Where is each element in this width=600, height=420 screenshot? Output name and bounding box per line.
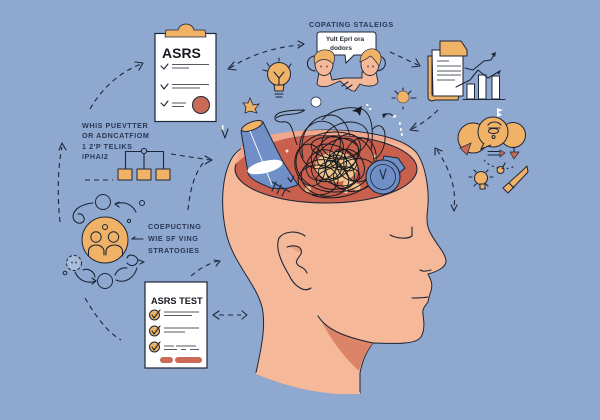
speech bubble	[317, 32, 376, 63]
text: left description: 1 2'P TELIKS	[82, 142, 133, 151]
org chart	[85, 148, 170, 180]
text: coping strategies label: COEPUCTING	[148, 222, 201, 231]
icon: people circle with orbit	[63, 194, 145, 288]
text: coping strategies label: STRATOGIES	[148, 246, 200, 255]
panel: ASRS test sheet	[145, 282, 207, 368]
nose and mouth	[412, 270, 431, 298]
speech bubble: dodors	[330, 45, 352, 52]
small white marks	[222, 104, 403, 136]
two people shaking hands	[307, 49, 385, 91]
text: left description	[82, 121, 149, 161]
panel: ASRS test sheet: ASRS TEST	[151, 296, 203, 306]
panel: ASRS clipboard: ASRS	[162, 45, 201, 61]
scribble arrowhead	[352, 106, 362, 116]
bulbs and pencil	[469, 160, 528, 193]
ear	[278, 232, 311, 290]
thought bubbles	[458, 108, 526, 159]
heading: coping strategies: COPATING STALEIGS	[309, 20, 394, 29]
text: left description: WHIS PUEVTTER	[82, 121, 149, 130]
icon: light bulb	[263, 58, 291, 97]
document with growth chart	[428, 41, 505, 101]
small white circle	[311, 97, 321, 107]
head profile	[223, 130, 446, 393]
tangled scribble	[275, 108, 385, 201]
star	[243, 98, 259, 113]
open skull cavity	[235, 130, 417, 203]
neck shadow	[322, 322, 373, 371]
tipped cylinder	[240, 118, 298, 196]
speech bubble: Yult Eprl ora	[326, 36, 365, 43]
text: coping strategies label: WIE SF VING	[148, 234, 198, 243]
small bulb	[392, 88, 416, 109]
text: left description: OR ADNCATFIOM	[82, 131, 149, 140]
panel: ASRS clipboard	[155, 24, 216, 122]
text: left description: IPHAI2	[82, 152, 108, 161]
eye	[390, 227, 412, 238]
clock	[366, 156, 405, 194]
yellow brain tissue	[286, 150, 378, 193]
text: coping strategies label	[148, 222, 201, 255]
dashed arrows	[58, 41, 457, 340]
